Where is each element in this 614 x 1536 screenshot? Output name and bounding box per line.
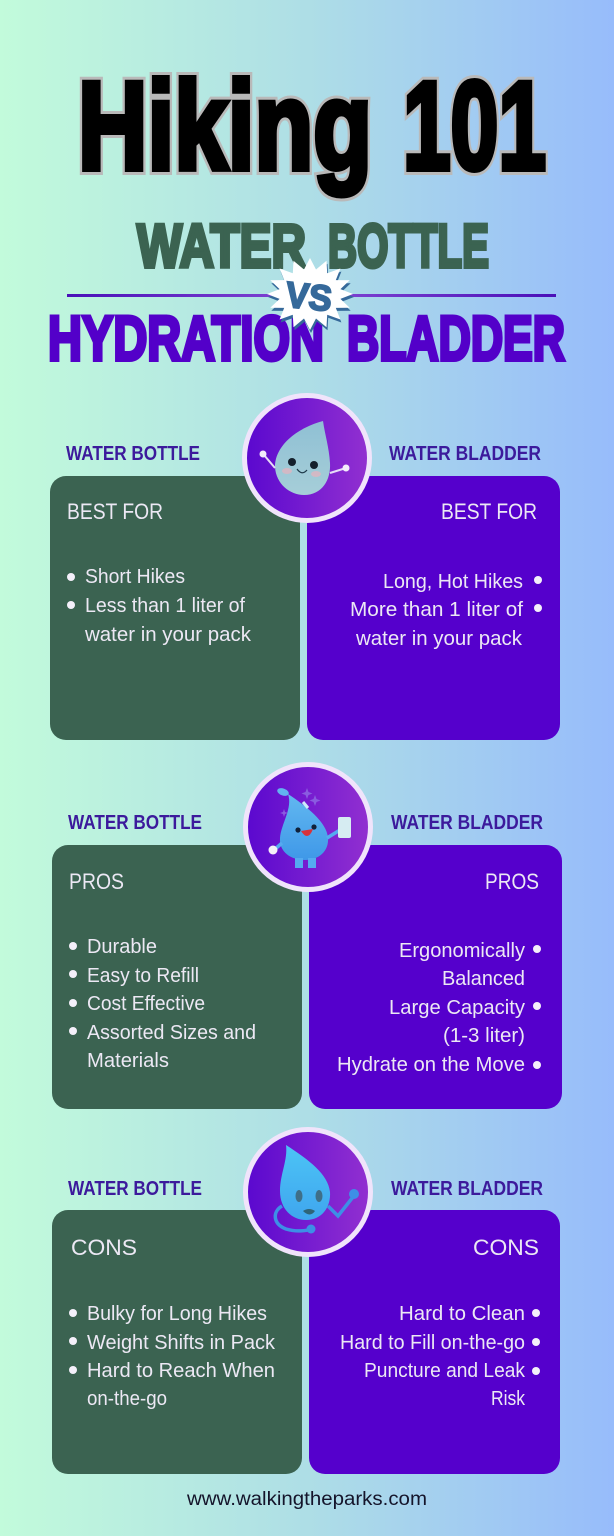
list: best for, water bladder: More than 1 liter of: [350, 598, 523, 621]
label: water bladder: WATER BLADDER: [391, 812, 543, 834]
list: best for, water bottle: Short Hikes: [85, 565, 185, 588]
vs badge: [267, 258, 354, 333]
list: best for, water bottle: Less than 1 liter of: [85, 594, 245, 617]
list: cons, water bladder: Puncture and Leak: [364, 1359, 526, 1382]
icon: pointing water drop: [246, 1130, 370, 1254]
label: water bladder: WATER BLADDER: [391, 1178, 543, 1200]
label: water bladder: WATER BLADDER: [389, 443, 541, 465]
list: pros, water bottle: [69, 935, 256, 1072]
heading: cons: CONS: [71, 1235, 137, 1260]
list: cons, water bladder: Hard to Clean: [399, 1302, 525, 1325]
title: Hiking: [78, 57, 372, 196]
list: pros, water bottle: Durable: [87, 935, 157, 958]
panel: best for, water bladder: [307, 476, 560, 740]
vs badge: VS: [284, 274, 334, 319]
list: cons, water bottle: on-the-go: [87, 1387, 167, 1410]
title: Hiking: [78, 57, 372, 196]
list: cons, water bottle: [69, 1302, 276, 1410]
list: pros, water bladder: Hydrate on the Move: [337, 1053, 525, 1076]
list: cons, water bottle: Hard to Reach When: [87, 1359, 275, 1382]
icon: smiling water drop: [244, 396, 370, 520]
list: best for, water bottle: [67, 565, 252, 646]
title: 101: [403, 57, 546, 196]
list: cons, water bottle: Weight Shifts in Pack: [87, 1331, 276, 1354]
divider line: [67, 294, 556, 297]
list: pros, water bladder: [337, 939, 541, 1076]
panel: cons, water bladder: [309, 1210, 560, 1474]
heading: pros: PROS: [485, 869, 539, 894]
panel: best for, water bottle: [50, 476, 300, 740]
heading: water bottle: [137, 212, 489, 280]
heading: cons: CONS: [473, 1235, 539, 1260]
footer url: www.walkingtheparks.com: [186, 1489, 427, 1510]
list: best for, water bladder: water in your pack: [355, 627, 523, 650]
heading: best for: BEST FOR: [441, 499, 537, 524]
list: cons, water bladder: Risk: [491, 1387, 526, 1410]
list: cons, water bladder: Hard to Fill on-the-go: [340, 1331, 525, 1354]
panel: pros, water bottle: [52, 845, 302, 1109]
heading: best for: BEST FOR: [67, 499, 163, 524]
list: best for, water bladder: Long, Hot Hikes: [383, 570, 523, 593]
list: pros, water bladder: Balanced: [442, 967, 525, 990]
panel: cons, water bottle: [52, 1210, 302, 1474]
icon: water drop holding a glass: [246, 764, 370, 890]
list: pros, water bottle: Cost Effective: [87, 992, 205, 1015]
heading: pros: PROS: [69, 869, 124, 894]
list: pros, water bladder: (1-3 liter): [443, 1024, 525, 1047]
list: cons, water bottle: Bulky for Long Hikes: [87, 1302, 267, 1325]
list: pros, water bladder: Large Capacity: [389, 996, 526, 1019]
label: water bottle: WATER BOTTLE: [68, 812, 202, 834]
list: best for, water bottle: water in your pack: [84, 623, 252, 646]
list: pros, water bottle: Assorted Sizes and: [87, 1021, 256, 1044]
title: 101: [403, 57, 546, 196]
list: pros, water bladder: Ergonomically: [399, 939, 526, 962]
label: water bottle: WATER BOTTLE: [66, 443, 200, 465]
label: water bottle: WATER BOTTLE: [68, 1178, 202, 1200]
list: best for, water bladder: [350, 570, 542, 650]
heading: water bottle: BOTTLE: [328, 212, 489, 280]
list: cons, water bladder: [340, 1302, 540, 1410]
list: pros, water bottle: Easy to Refill: [87, 964, 199, 987]
panel: pros, water bladder: [309, 845, 562, 1109]
heading: hydration bladder: HYDRATION: [48, 304, 324, 374]
heading: water bottle: WATER: [137, 212, 306, 280]
list: pros, water bottle: Materials: [87, 1049, 169, 1072]
